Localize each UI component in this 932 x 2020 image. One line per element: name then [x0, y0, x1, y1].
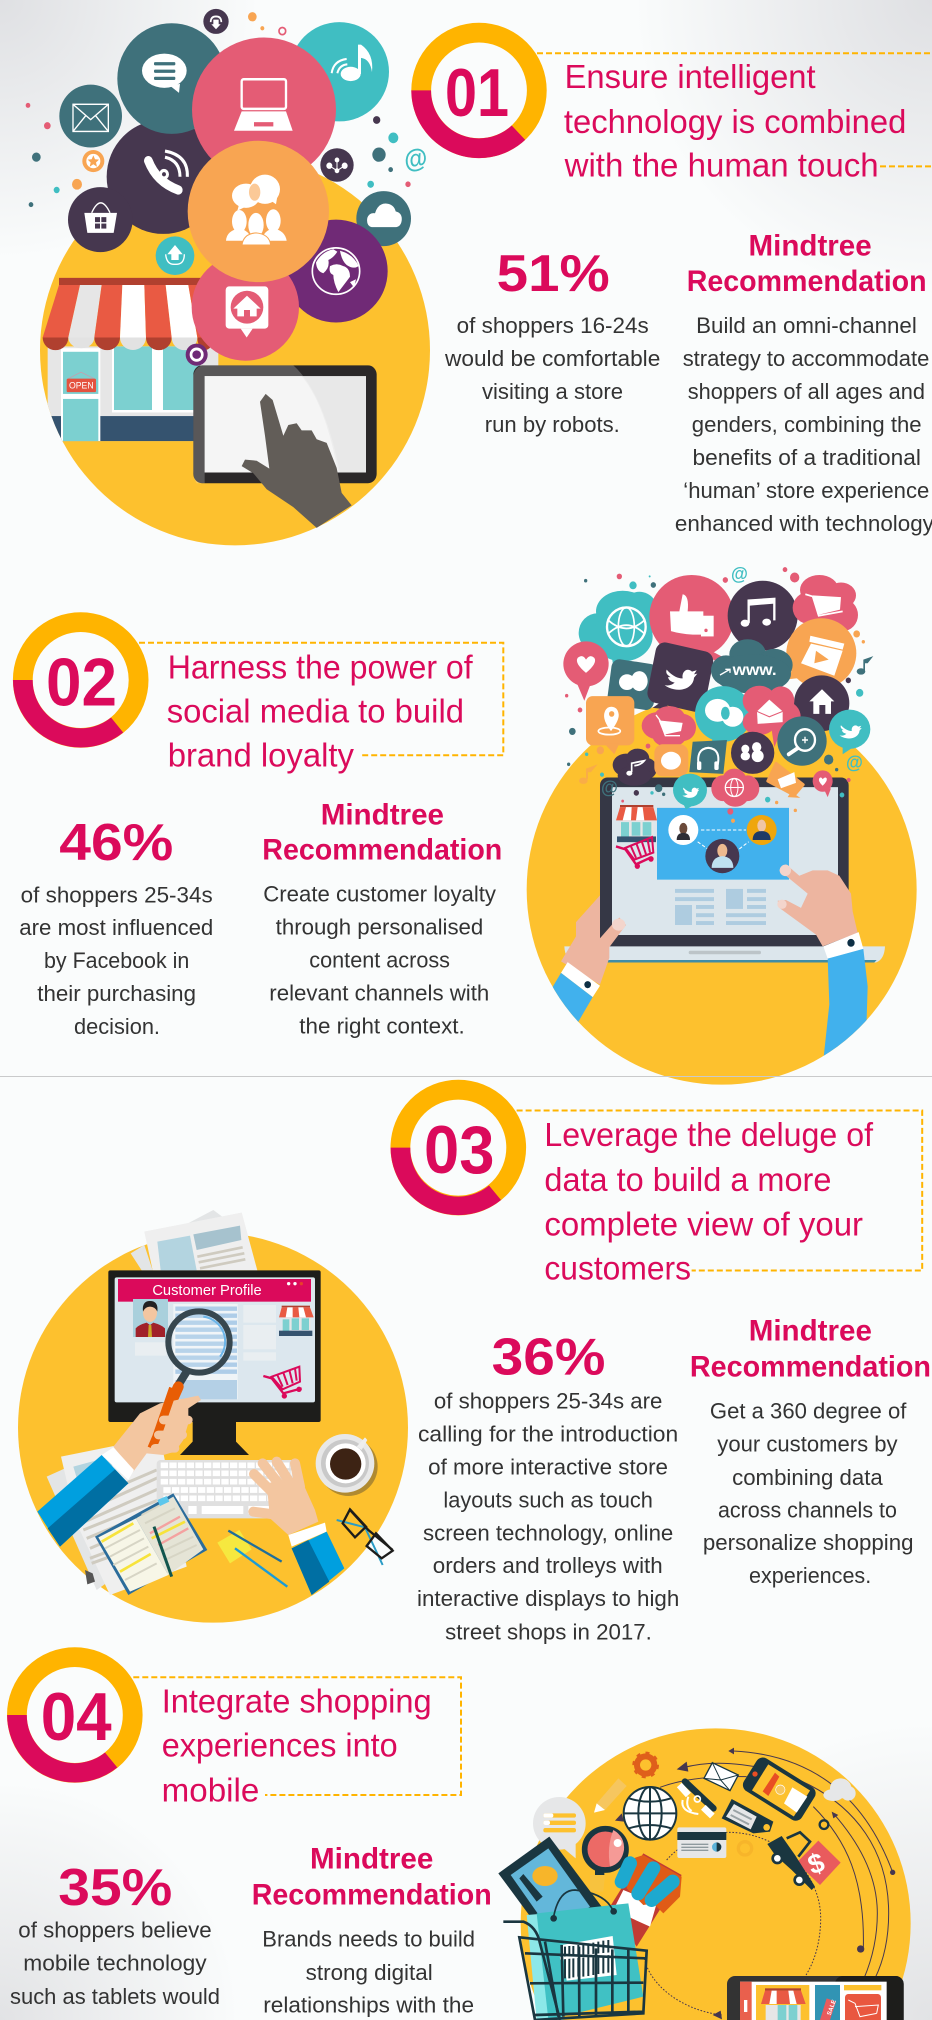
recommendation 04 [252, 1842, 492, 2018]
recommendation 04: Brands needs to build [262, 1927, 475, 1952]
bubble: shopping bag [68, 187, 133, 252]
statistic 36%: screen technology, online [423, 1520, 673, 1545]
statistic 51%: run by robots. [485, 412, 620, 437]
decorative dots [26, 12, 411, 207]
credit card [677, 1827, 726, 1858]
bubble: chat [654, 744, 688, 776]
bubble: search [777, 716, 827, 766]
recommendation 04: Mindtree [310, 1842, 433, 1875]
recommendation 03 [690, 1314, 931, 1588]
bubble: globe [284, 220, 388, 322]
recommendation 02: the right context. [299, 1013, 465, 1038]
number ring 03 [391, 1090, 516, 1215]
statistic 51%: 51% [497, 245, 610, 303]
bubble: thumbs up [649, 575, 734, 661]
bubble: www [711, 639, 793, 694]
illustration: store, tablet and app bubbles [26, 9, 430, 545]
recommendation 02: Create customer loyalty [263, 882, 496, 907]
recommendation 03: experiences. [749, 1563, 871, 1588]
statistic 46%: 46% [59, 814, 173, 872]
bubble: cart cloud [642, 706, 696, 747]
panel: section 03 [18, 1090, 931, 1644]
smartphone [740, 1755, 818, 1823]
store front [40, 278, 218, 441]
bubble: chat [117, 23, 226, 134]
cloud [823, 1778, 856, 1801]
laptop [564, 777, 885, 962]
recommendation 04: Recommendation [252, 1878, 492, 1911]
recommendation 04: strong digital [306, 1960, 433, 1985]
profile photo [133, 1299, 168, 1337]
bubble: globe cloud small [711, 769, 759, 807]
heading 01: with the human touch [564, 146, 879, 183]
statistic 35%: 35% [58, 1859, 172, 1917]
tablet behind bag [498, 1837, 602, 1943]
number ring 02: 02 [46, 645, 117, 721]
icon: at signs: @ [846, 752, 863, 773]
bubble: people [731, 732, 774, 774]
recommendation 03: Mindtree [749, 1314, 872, 1348]
right hand and sleeve [253, 1462, 344, 1595]
bubble: twitter [646, 641, 715, 714]
tablet with pointing hand [193, 365, 377, 528]
bubble: phone [107, 120, 220, 234]
number ring 04 [7, 1657, 133, 1783]
recommendation 01: genders, combining the [692, 412, 922, 437]
icon: top badge [203, 9, 229, 34]
statistic 46%: their purchasing [37, 981, 196, 1006]
bubble: twitter small [829, 710, 870, 754]
bubble: network [320, 148, 354, 182]
left hand [552, 896, 626, 1022]
screen header [118, 1279, 311, 1302]
statistic 46%: by Facebook in [44, 948, 189, 973]
statistic 46%: are most influenced [19, 915, 213, 940]
bubble: www: www. [732, 662, 777, 679]
statistic 51% [444, 245, 660, 437]
bubble: people talking [188, 141, 329, 282]
bubble: house [794, 675, 849, 731]
icon: gear [186, 344, 208, 366]
phone at bottom [727, 1976, 904, 2020]
recommendation 01: benefits of a traditional [692, 445, 921, 470]
statistic 35%: such as tablets would [10, 1984, 220, 2009]
flow arcs [644, 1751, 893, 2015]
store [610, 1853, 682, 1947]
bubble: laptop [192, 37, 336, 182]
recommendation 03: Get a 360 degree of [710, 1399, 907, 1424]
bubble: upload cloud [607, 658, 659, 711]
envelope [704, 1763, 738, 1791]
bubble: upload [156, 236, 194, 275]
heading 03: data to build a more [544, 1161, 831, 1198]
recommendation 02: relevant channels with [269, 980, 489, 1005]
recommendation 02 [262, 798, 502, 1038]
heading 03: complete view of your [544, 1205, 863, 1242]
illustration: customer profile desk [18, 1210, 408, 1623]
recommendation 03: combining data [732, 1465, 884, 1490]
icon: at signs [601, 563, 863, 798]
recommendation 02: Recommendation [262, 833, 502, 866]
recommendation 03: personalize shopping [703, 1530, 914, 1555]
mini store [616, 805, 657, 842]
recommendation 01: shoppers of all ages and [688, 379, 925, 404]
statistic 46% [19, 814, 213, 1039]
recommendation 04: relationships with the [263, 1993, 474, 2018]
icon: at sign: @ [402, 142, 430, 175]
statistic 46%: of shoppers 25-34s [21, 882, 213, 907]
statistic 36%: calling for the introduction [418, 1422, 678, 1447]
bubble: cart tag [768, 763, 803, 798]
heading 03 [517, 1110, 922, 1286]
globe [624, 1787, 676, 1840]
statistic 36%: layouts such as touch [443, 1487, 653, 1512]
recommendation 01 [675, 229, 932, 536]
heading 04 [133, 1677, 461, 1809]
statistic 35% [10, 1859, 220, 2009]
heading 03: Leverage the deluge of [544, 1116, 874, 1153]
recommendation 01: strategy to accommodate [683, 346, 929, 371]
statistic 35%: mobile technology [23, 1951, 207, 1976]
heading 02: Harness the power of [168, 648, 473, 685]
bubble: heart [563, 641, 609, 701]
recommendation 03: across channels to [718, 1497, 897, 1522]
open sign [67, 372, 96, 392]
bubble: home location [192, 254, 299, 361]
panel: section 01 [26, 9, 932, 545]
recommendation 02: content across [309, 948, 450, 973]
forklift and dollar tag [767, 1832, 841, 1890]
monitor [108, 1270, 321, 1455]
magnifying glass [153, 1311, 230, 1448]
bubble: video [781, 618, 856, 688]
bubble: mail [743, 686, 801, 747]
heading 04: mobile [162, 1772, 259, 1809]
icon: star badge [82, 150, 104, 172]
shopping bag [527, 1890, 643, 2020]
heading 02: social media to build [167, 693, 464, 730]
sticky note and pens [217, 1530, 287, 1587]
icon: at signs: @ [601, 777, 618, 798]
bubble: music [290, 22, 389, 121]
heading 03: customers [544, 1249, 691, 1286]
number ring 01: 01 [445, 55, 509, 131]
heading 04: experiences into [162, 1727, 398, 1764]
icon: at signs: @ [731, 563, 748, 584]
heading 01: Ensure intelligent [565, 58, 816, 95]
number ring 04: 04 [41, 1679, 112, 1755]
documents left [47, 1437, 187, 1595]
luggage tag [722, 1799, 773, 1833]
panel: section 04 [7, 1657, 911, 2020]
illustration: laptop with social media bubbles [527, 563, 917, 1085]
mini store [279, 1306, 314, 1336]
recommendation 01: Mindtree [748, 229, 872, 262]
coffee cup [316, 1434, 378, 1496]
recommendation 01: ‘human’ store experience [683, 478, 929, 503]
bubble: location [586, 696, 634, 754]
notebook [95, 1493, 207, 1595]
left hand and sleeve [37, 1388, 201, 1547]
mini cart [616, 837, 654, 869]
cart [263, 1367, 302, 1399]
icon: notes [857, 656, 873, 675]
number ring 01 [411, 33, 537, 158]
phone at bottom: SALE [827, 1999, 838, 2016]
paper stack top [131, 1210, 257, 1270]
bubble: globe cloud [579, 591, 659, 674]
illustration: mobile shopping [498, 1728, 911, 2020]
bubble: music [728, 581, 798, 651]
recommendation 01: Recommendation [687, 265, 927, 298]
statistic 51%: would be comfortable [444, 346, 660, 371]
magnifier [585, 1829, 626, 1892]
heading 02: brand loyalty [168, 737, 354, 774]
bubble: cart cloud [793, 575, 858, 631]
forklift and dollar tag: $ [804, 1846, 828, 1880]
pencil [594, 1778, 627, 1813]
decorative dots [565, 567, 865, 823]
statistic 51%: visiting a store [482, 379, 623, 404]
article block [675, 889, 766, 925]
heading 01: technology is combined [564, 103, 906, 140]
statistic 36%: street shops in 2017. [445, 1619, 652, 1644]
avatars [668, 815, 777, 873]
statistic 36%: of shoppers 25-34s are [434, 1388, 662, 1413]
statistic 35%: of shoppers believe [18, 1918, 212, 1943]
screen header: Customer Profile [152, 1283, 262, 1299]
number ring 03: 03 [424, 1112, 494, 1188]
statistic 36%: interactive displays to high [417, 1586, 679, 1611]
recommendation 02: through personalised [276, 914, 483, 939]
statistic 51%: of shoppers 16-24s [457, 313, 649, 338]
flow arrowheads and dots [615, 1748, 895, 2019]
statistic 46%: decision. [74, 1014, 160, 1039]
number ring 02 [13, 622, 139, 748]
statistic 36% [417, 1329, 679, 1644]
bubble: envelope [59, 85, 122, 147]
bubble: twitter small [673, 774, 707, 810]
right hand [778, 864, 868, 1076]
shopping cart [503, 1922, 647, 2020]
recommendation 01: Build an omni-channel [696, 313, 917, 338]
recommendation 01: enhanced with technology [675, 511, 932, 536]
gears [634, 1753, 828, 1855]
statistic 36%: 36% [492, 1329, 605, 1387]
bubble: conversation [695, 686, 752, 751]
statistic 36%: orders and trolleys with [433, 1553, 663, 1578]
recommendation 03: your customers by [717, 1432, 898, 1456]
bubble: heart small [813, 770, 833, 797]
bubble: cloud [356, 191, 411, 246]
heading 01 [537, 53, 932, 183]
glasses [337, 1509, 393, 1565]
speech bubble [533, 1797, 586, 1858]
open sign: OPEN [69, 380, 94, 391]
bubble: headphones [689, 740, 727, 774]
statistic 36%: of more interactive store [428, 1454, 668, 1480]
recommendation 02: Mindtree [321, 798, 444, 831]
heading 04: Integrate shopping [162, 1682, 432, 1719]
panel: section 02 [13, 563, 917, 1085]
bubble: music cloud [613, 749, 657, 786]
handset [679, 1782, 713, 1816]
keyboard [157, 1460, 295, 1518]
heading 02 [139, 643, 503, 774]
